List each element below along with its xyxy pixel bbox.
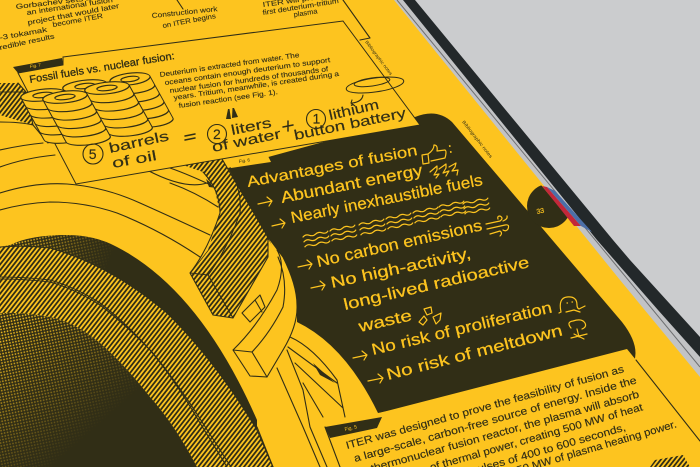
figure 7 tag [13,58,63,73]
figure 5 tag [325,417,382,438]
yellow magnet coil [233,237,297,377]
deuterium paragraph: oceans contain enough deuterium to support [164,57,331,87]
text: no risk of proliferation: No risk of proliferation [370,299,554,359]
timeline column: tokamak results: -3 tokamak [0,27,48,42]
equation: 1 lithium button battery: lithium [327,96,380,123]
page edge thin line [397,0,700,367]
panel: ITER description (Fig. 5) [325,349,700,467]
tokamak illustration [0,83,273,467]
text: nearly inexhaustible fuels: Nearly inexhaustible fuels [289,172,484,227]
text: no high-activity, long-lived radioactive waste: No high-activity, [329,245,473,292]
upper left hatched coil [0,83,55,167]
arrow: abundant energy [258,197,272,206]
page number tab [527,184,592,232]
text: no high-activity, long-lived radioactive waste: long-lived radioactive [342,254,531,314]
panel: fossil fuels vs nuclear fusion (Fig. 7) [13,21,420,184]
arrow: no risk of meltdown [368,374,383,383]
figure 5 box [325,349,700,467]
equation: 5 barrels of oil: 5 [89,146,97,162]
plus sign [283,121,293,131]
equation: 2 liters of water: of water [210,125,283,155]
timeline fragments at the top [0,0,370,52]
plasma dark core with halftone [0,313,197,467]
text: no risk of meltdown: No risk of meltdown [385,322,564,384]
timeline column: Gorbachev [15,0,121,29]
deuterium paragraph [159,52,340,110]
equation: 5 barrels of oil [83,127,170,171]
timeline column: first plasma: first deuterium-tritium [262,0,340,17]
hatched magnet coil [183,159,268,318]
arrow: no risk of proliferation [353,351,367,360]
ITER paragraph: ITER was designed to prove the feasibility of fusion as [345,363,625,452]
margin caption: Bibliographic notes [461,120,494,160]
heading: fossil fuels vs nuclear fusion: Fossil fuels vs. nuclear fusion: [29,50,176,86]
icon: wind [486,216,509,236]
page edge: grey paper layers [390,0,700,380]
figure 7 tag: Fig. 7 [29,62,42,69]
icon: water bottles [226,108,238,119]
equation: 1 lithium button battery: button battery [292,104,407,143]
timeline column: tokamak results: redible results [0,33,56,52]
equation: 2 liters of water [208,114,283,155]
equation: 1 lithium button battery: 1 [312,110,320,126]
deuterium paragraph: fusion reaction (see Fig. 1). [178,89,278,110]
figure 5 box outline [325,360,700,467]
lower tokamak fan lines [257,337,345,467]
equation: 1 lithium button battery [292,96,407,143]
book cover dark strip [403,0,700,357]
text: no high-activity, long-lived radioactive waste [329,245,531,336]
ITER paragraph [345,363,678,467]
icon: oil barrels [18,70,176,148]
timeline column: Gorbachev: project that would later [27,3,121,27]
ITER paragraph: a large-scale, carbon-free source of energy. Inside the [353,374,638,465]
hatched vessel band [0,246,273,467]
timeline column: Gorbachev: become ITER [52,13,104,29]
figure 6 tag: Fig. 6 [238,157,251,164]
arrow: no high-activity waste [311,281,325,290]
text: no carbon emissions: No carbon emissions [315,217,484,271]
text: abundant energy: Abundant energy [279,162,424,207]
icon: water waves [303,198,490,247]
outer coil lines [0,168,218,257]
equation: 2 liters of water: 2 [213,126,221,142]
icon: mushroom cloud [569,320,587,339]
deuterium paragraph: years. Tritium, meanwhile, is created during a [173,71,340,102]
deuterium paragraph: Deuterium is extracted from water. The [159,52,300,79]
equation: 2 liters of water: liters [229,114,273,138]
text: no high-activity, long-lived radioactive waste: waste [356,307,414,336]
dark panel: advantages of fusion background [228,113,636,413]
deuterium paragraph: nuclear fusion for hundreds of thousands of [169,66,329,95]
timeline column: construction: on ITER begins [162,13,217,30]
page number tab: 33 [536,207,545,216]
hatched corner illustration [650,455,690,467]
timeline column: first plasma: plasma [293,8,318,19]
timeline column: construction: Construction work [151,6,218,20]
icon: button battery [345,74,405,106]
equals sign [185,134,195,140]
heading: advantages of fusion: Advantages of fusion [246,142,419,191]
equation: 5 barrels of oil: barrels [107,127,170,156]
halftone crescent [0,235,257,430]
figure 5 tag: Fig. 5 [344,424,358,433]
margin caption upper: Bibliographic notes [364,40,394,77]
icon: proliferation figure [559,297,585,313]
arrow: no carbon emissions [298,260,312,269]
figure 6 tag [229,154,271,168]
heading colon: : [447,140,453,156]
icon: lightning bolts [430,163,458,178]
arrow: nearly inexhaustible fuels [272,219,285,228]
timeline column: tokamak results [0,27,56,52]
equation: 5 barrels of oil: of oil [111,147,158,171]
panel: advantages of fusion text (Fig. 6) [229,140,587,384]
dark spot behind coil [206,179,217,188]
icon: radioactive symbol [419,307,441,325]
figure 7 box [18,21,420,184]
icon: thumbs up [422,145,446,164]
timeline column: construction [151,6,218,30]
timeline column: Gorbachev: an international fusion [26,0,113,17]
